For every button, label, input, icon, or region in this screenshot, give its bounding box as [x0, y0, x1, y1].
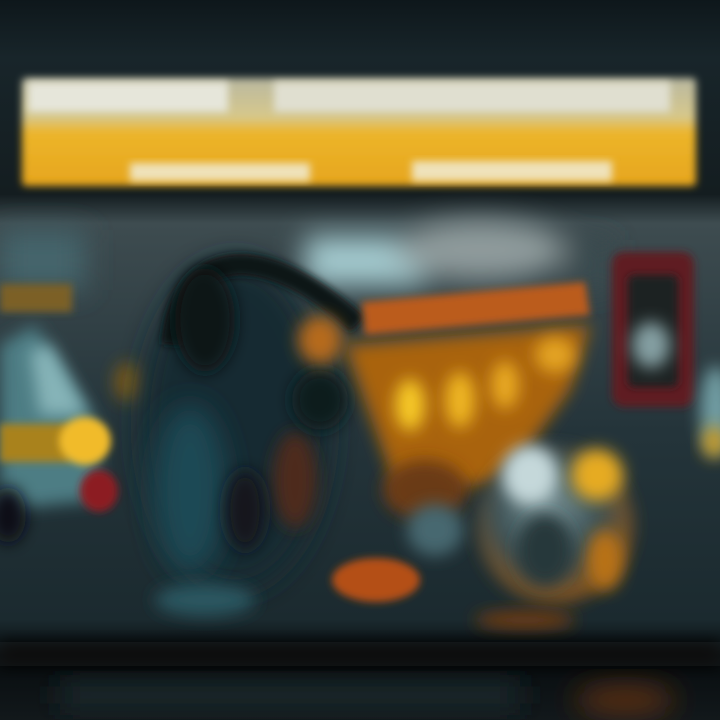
title banner — [22, 78, 696, 186]
yellow glow one — [395, 379, 425, 431]
bottle body — [0, 325, 100, 510]
yellow patch — [571, 449, 623, 501]
basket body — [345, 325, 590, 500]
teal ear cup — [154, 405, 226, 575]
red phone — [612, 252, 694, 407]
orange reflection under ball — [475, 610, 575, 630]
white highlight — [502, 445, 558, 505]
yellow glow — [59, 417, 111, 465]
banner glow — [22, 78, 696, 186]
light sky patch behind objects — [0, 220, 610, 290]
dark centre — [517, 514, 573, 586]
yellow glow four — [535, 337, 575, 373]
teal body — [700, 366, 720, 454]
lower orange patch — [587, 530, 623, 590]
teal blob — [407, 504, 463, 556]
yellow glow two — [445, 372, 475, 428]
small amber light — [114, 362, 142, 402]
bottle on left — [0, 284, 142, 543]
striped ball — [475, 445, 633, 630]
headset body — [140, 260, 330, 590]
yellow accent — [702, 426, 720, 458]
subheading blur: right — [412, 161, 612, 181]
bottom strip reflection — [0, 642, 720, 714]
left orange end — [298, 316, 342, 364]
phone screen highlight — [632, 322, 670, 368]
dark interior — [175, 268, 235, 372]
top orange bar — [362, 282, 590, 335]
heading blur: first line left — [28, 82, 228, 112]
teal reflection — [60, 684, 520, 706]
dark core — [225, 470, 265, 550]
orange blob — [332, 558, 420, 602]
dark headset shape — [140, 260, 358, 616]
dark base — [0, 487, 26, 543]
yellow glow three — [491, 361, 519, 409]
shadow right — [292, 370, 348, 430]
phone frame — [612, 252, 694, 407]
subheading blur: left — [130, 163, 310, 181]
headband arc — [172, 265, 358, 345]
heading blur: first line right — [274, 82, 670, 112]
orange and yellow basket — [298, 282, 590, 602]
right edge object — [700, 366, 720, 458]
yellow label band — [0, 424, 70, 462]
phone screen — [628, 275, 678, 387]
red accent — [80, 470, 118, 512]
orange reflection — [575, 686, 675, 714]
bottle cap — [0, 284, 72, 312]
dark foreground — [0, 642, 720, 666]
brown core — [273, 432, 317, 528]
bottle highlight — [30, 345, 88, 415]
ball body — [477, 447, 633, 603]
base glow — [155, 584, 255, 616]
lower brown fill — [383, 460, 467, 520]
